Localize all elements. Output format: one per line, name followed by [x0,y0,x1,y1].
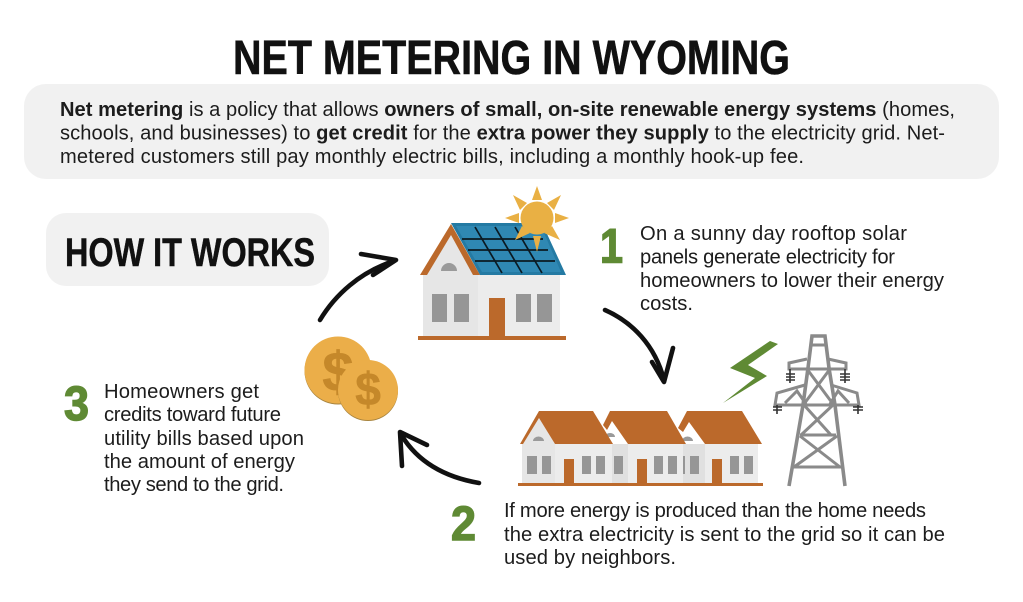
icon: solar house [418,223,566,340]
how it works label [46,213,329,286]
icon: lightning bolt [723,341,778,403]
orange roofs [520,411,762,444]
arrow: step 1 to 2 [605,310,673,382]
arrow: step 2 to 3 [400,432,479,483]
step 1 text: costs. [640,293,693,315]
step 2 text [504,500,945,569]
how it works label: HOW IT WORKS [65,231,315,275]
solar roof [451,223,566,275]
icon: coins: $ [322,340,354,403]
definition line 2: schools, and businesses) to get credit for the extra power they supply to the electricity grid. Net- [60,122,945,144]
step 3 text: Homeowners get [104,381,259,403]
title: NET METERING IN WYOMING [233,32,790,85]
icon: coins: $ [355,363,381,415]
icon: transmission tower [773,336,863,486]
panel: definition [24,84,999,179]
step 1 text: homeowners to lower their energy [640,270,945,292]
step 2 text: used by neighbors. [504,547,676,569]
step 3 text: the amount of energy [104,451,296,473]
step 1 text: On a sunny day rooftop solar [640,223,907,245]
step 2 text: If more energy is produced than the home needs [504,500,926,522]
step 2 text: the extra electricity is sent to the grid so it can be [504,524,945,546]
definition line 3: metered customers still pay monthly electric bills, including a monthly hook-up fee. [60,146,804,168]
icon: coins [304,336,398,421]
icon: row of houses [518,411,763,486]
definition line 1: Net metering is a policy that allows owners of small, on-site renewable energy systems (homes, [60,99,955,121]
step 3 text: credits toward future [104,404,281,426]
step 3 text [104,381,304,496]
step 1 number: 1 [600,220,623,274]
step 1 text [640,223,945,315]
step 1 text: panels generate electricity for [640,246,895,268]
icon: sun [505,186,569,252]
step 2 number: 2 [451,498,476,551]
step 3 number: 3 [64,378,89,431]
gable trim [420,224,480,275]
step 3 text: utility bills based upon [104,428,304,450]
arrow: step 3 to 1 [320,254,396,320]
step 3 text: they send to the grid. [104,474,284,496]
